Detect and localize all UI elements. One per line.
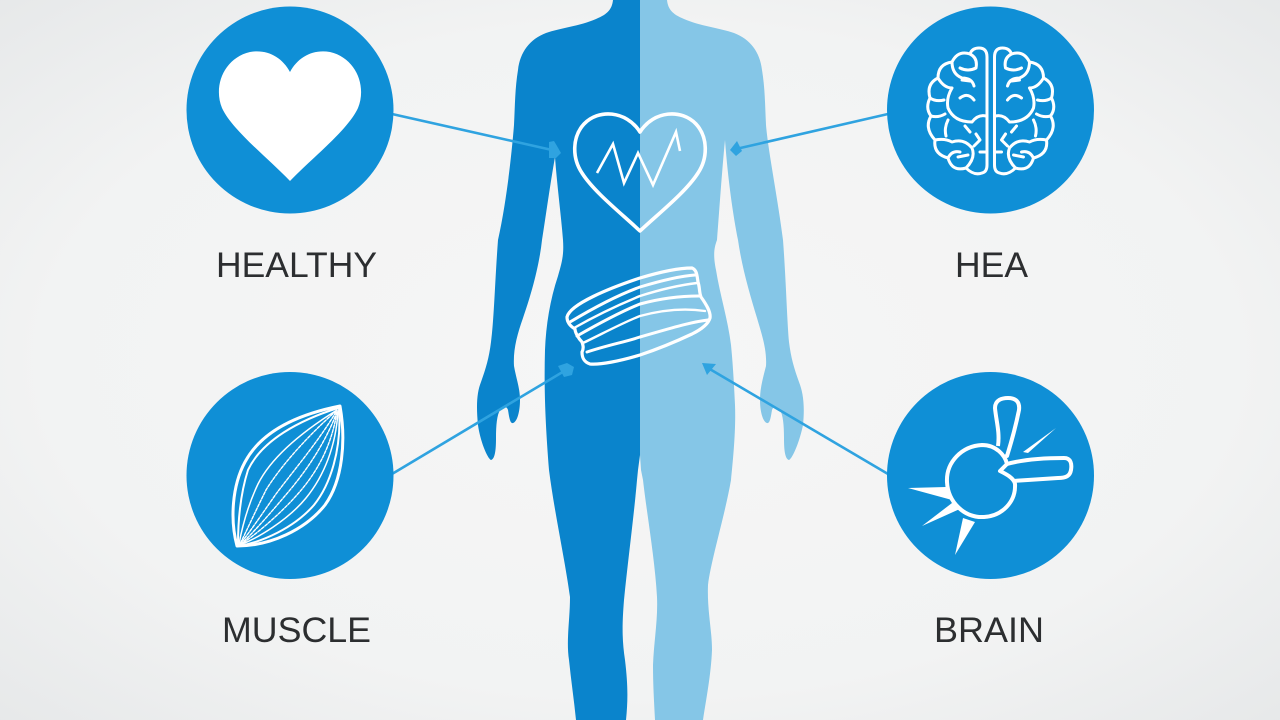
icon: stacked muscle band on abdomen <box>567 268 710 364</box>
human body silhouette <box>477 0 804 720</box>
panel: heart icon and label <box>186 6 394 285</box>
panel: muscle icon and label <box>186 372 394 650</box>
icon: joint badge <box>887 372 1094 579</box>
arrow: healthy to body <box>392 114 561 158</box>
label: HEA: HEA <box>955 246 1029 285</box>
label: MUSCLE: MUSCLE <box>222 611 371 650</box>
body: right light half <box>640 0 804 720</box>
icon: heart badge <box>186 6 394 214</box>
arrow: muscle to body <box>392 363 574 474</box>
icon: brain badge <box>887 6 1094 214</box>
panel: brain icon and label <box>887 6 1094 285</box>
label: BRAIN: BRAIN <box>934 611 1044 650</box>
icon: muscle badge <box>186 372 394 579</box>
icon: heart with ECG line on chest <box>575 114 705 231</box>
arrow: brain to body <box>730 114 888 156</box>
panel: joint icon and label <box>887 372 1094 650</box>
arrow: joint to body <box>702 363 888 474</box>
body: left dark half <box>477 0 640 720</box>
label: HEALTHY: HEALTHY <box>216 246 377 285</box>
